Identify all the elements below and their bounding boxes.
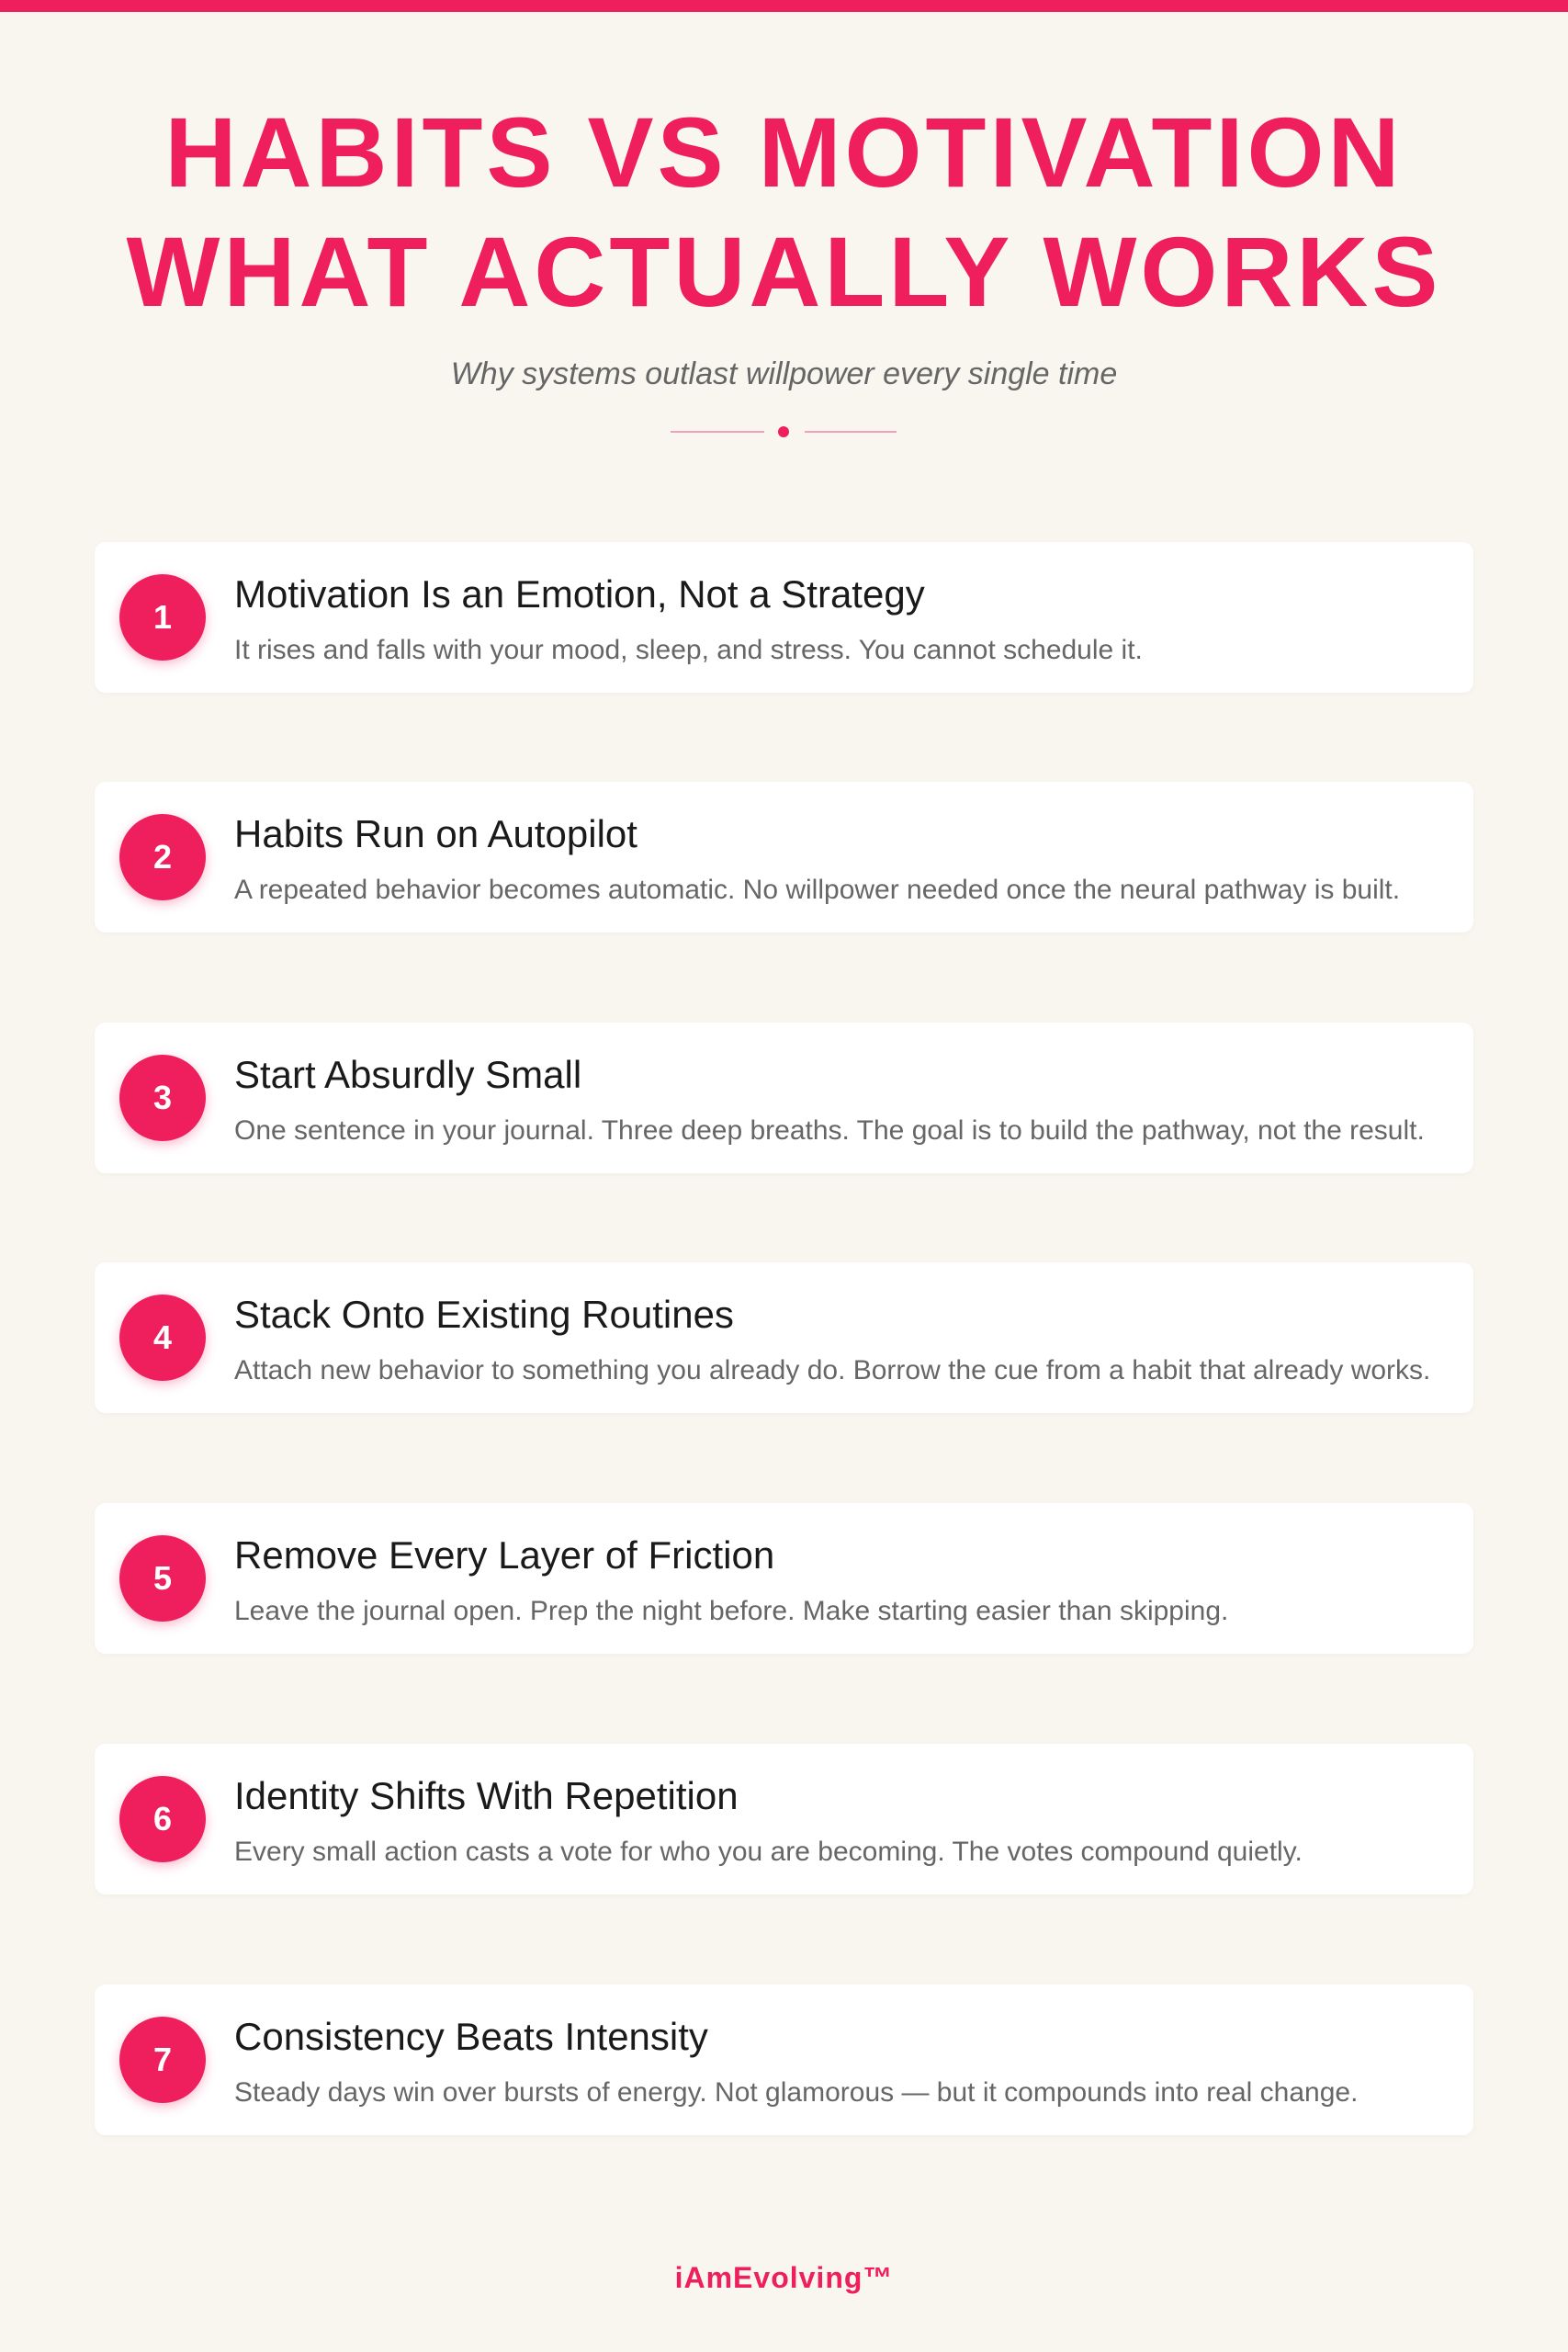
- description 6: Every small action casts a vote for who you are becoming. The votes compound quietly.: [234, 1837, 1303, 1867]
- heading 3: Start Absurdly Small: [234, 1053, 581, 1096]
- description 1: It rises and falls with your mood, sleep, and stress. You cannot schedule it.: [234, 635, 1143, 665]
- description 4: Attach new behavior to something you already do. Borrow the cue from a habit that already works.: [234, 1355, 1430, 1385]
- description 2: A repeated behavior becomes automatic. No willpower needed once the neural pathway is built.: [234, 875, 1400, 905]
- card 5: [95, 1503, 1473, 1654]
- number 1: 1: [153, 598, 172, 636]
- footer brand: iAmEvolving™: [675, 2261, 893, 2294]
- title: HABITS VS MOTIVATION: [165, 96, 1404, 208]
- description 5: Leave the journal open. Prep the night before. Make starting easier than skipping.: [234, 1596, 1228, 1626]
- description 3: One sentence in your journal. Three deep breaths. The goal is to build the pathway, not the result.: [234, 1115, 1425, 1146]
- heading 7: Consistency Beats Intensity: [234, 2015, 708, 2058]
- heading 2: Habits Run on Autopilot: [234, 812, 637, 855]
- heading 6: Identity Shifts With Repetition: [234, 1774, 739, 1817]
- card 4: [95, 1262, 1473, 1413]
- card 6: [95, 1744, 1473, 1894]
- card 7: [95, 1984, 1473, 2135]
- number 3: 3: [153, 1079, 172, 1116]
- card 2: [95, 782, 1473, 933]
- number 2: 2: [153, 838, 172, 876]
- title: [127, 96, 1441, 327]
- subtitle: Why systems outlast willpower every single time: [451, 356, 1117, 391]
- number 4: 4: [153, 1318, 172, 1356]
- heading 5: Remove Every Layer of Friction: [234, 1533, 774, 1577]
- card 1: [95, 542, 1473, 693]
- number 7: [119, 2017, 206, 2103]
- number 1: [119, 574, 206, 661]
- card 3: [95, 1023, 1473, 1173]
- number 4: [119, 1295, 206, 1381]
- heading 4: Stack Onto Existing Routines: [234, 1293, 734, 1336]
- heading 1: Motivation Is an Emotion, Not a Strategy: [234, 572, 925, 616]
- number 6: [119, 1776, 206, 1862]
- number 2: [119, 814, 206, 900]
- number 5: [119, 1535, 206, 1622]
- number 5: 5: [153, 1559, 172, 1597]
- title: WHAT ACTUALLY WORKS: [127, 216, 1441, 327]
- number 3: [119, 1055, 206, 1141]
- number 7: 7: [153, 2041, 172, 2078]
- description 7: Steady days win over bursts of energy. Not glamorous — but it compounds into real change.: [234, 2077, 1358, 2108]
- number 6: 6: [153, 1800, 172, 1838]
